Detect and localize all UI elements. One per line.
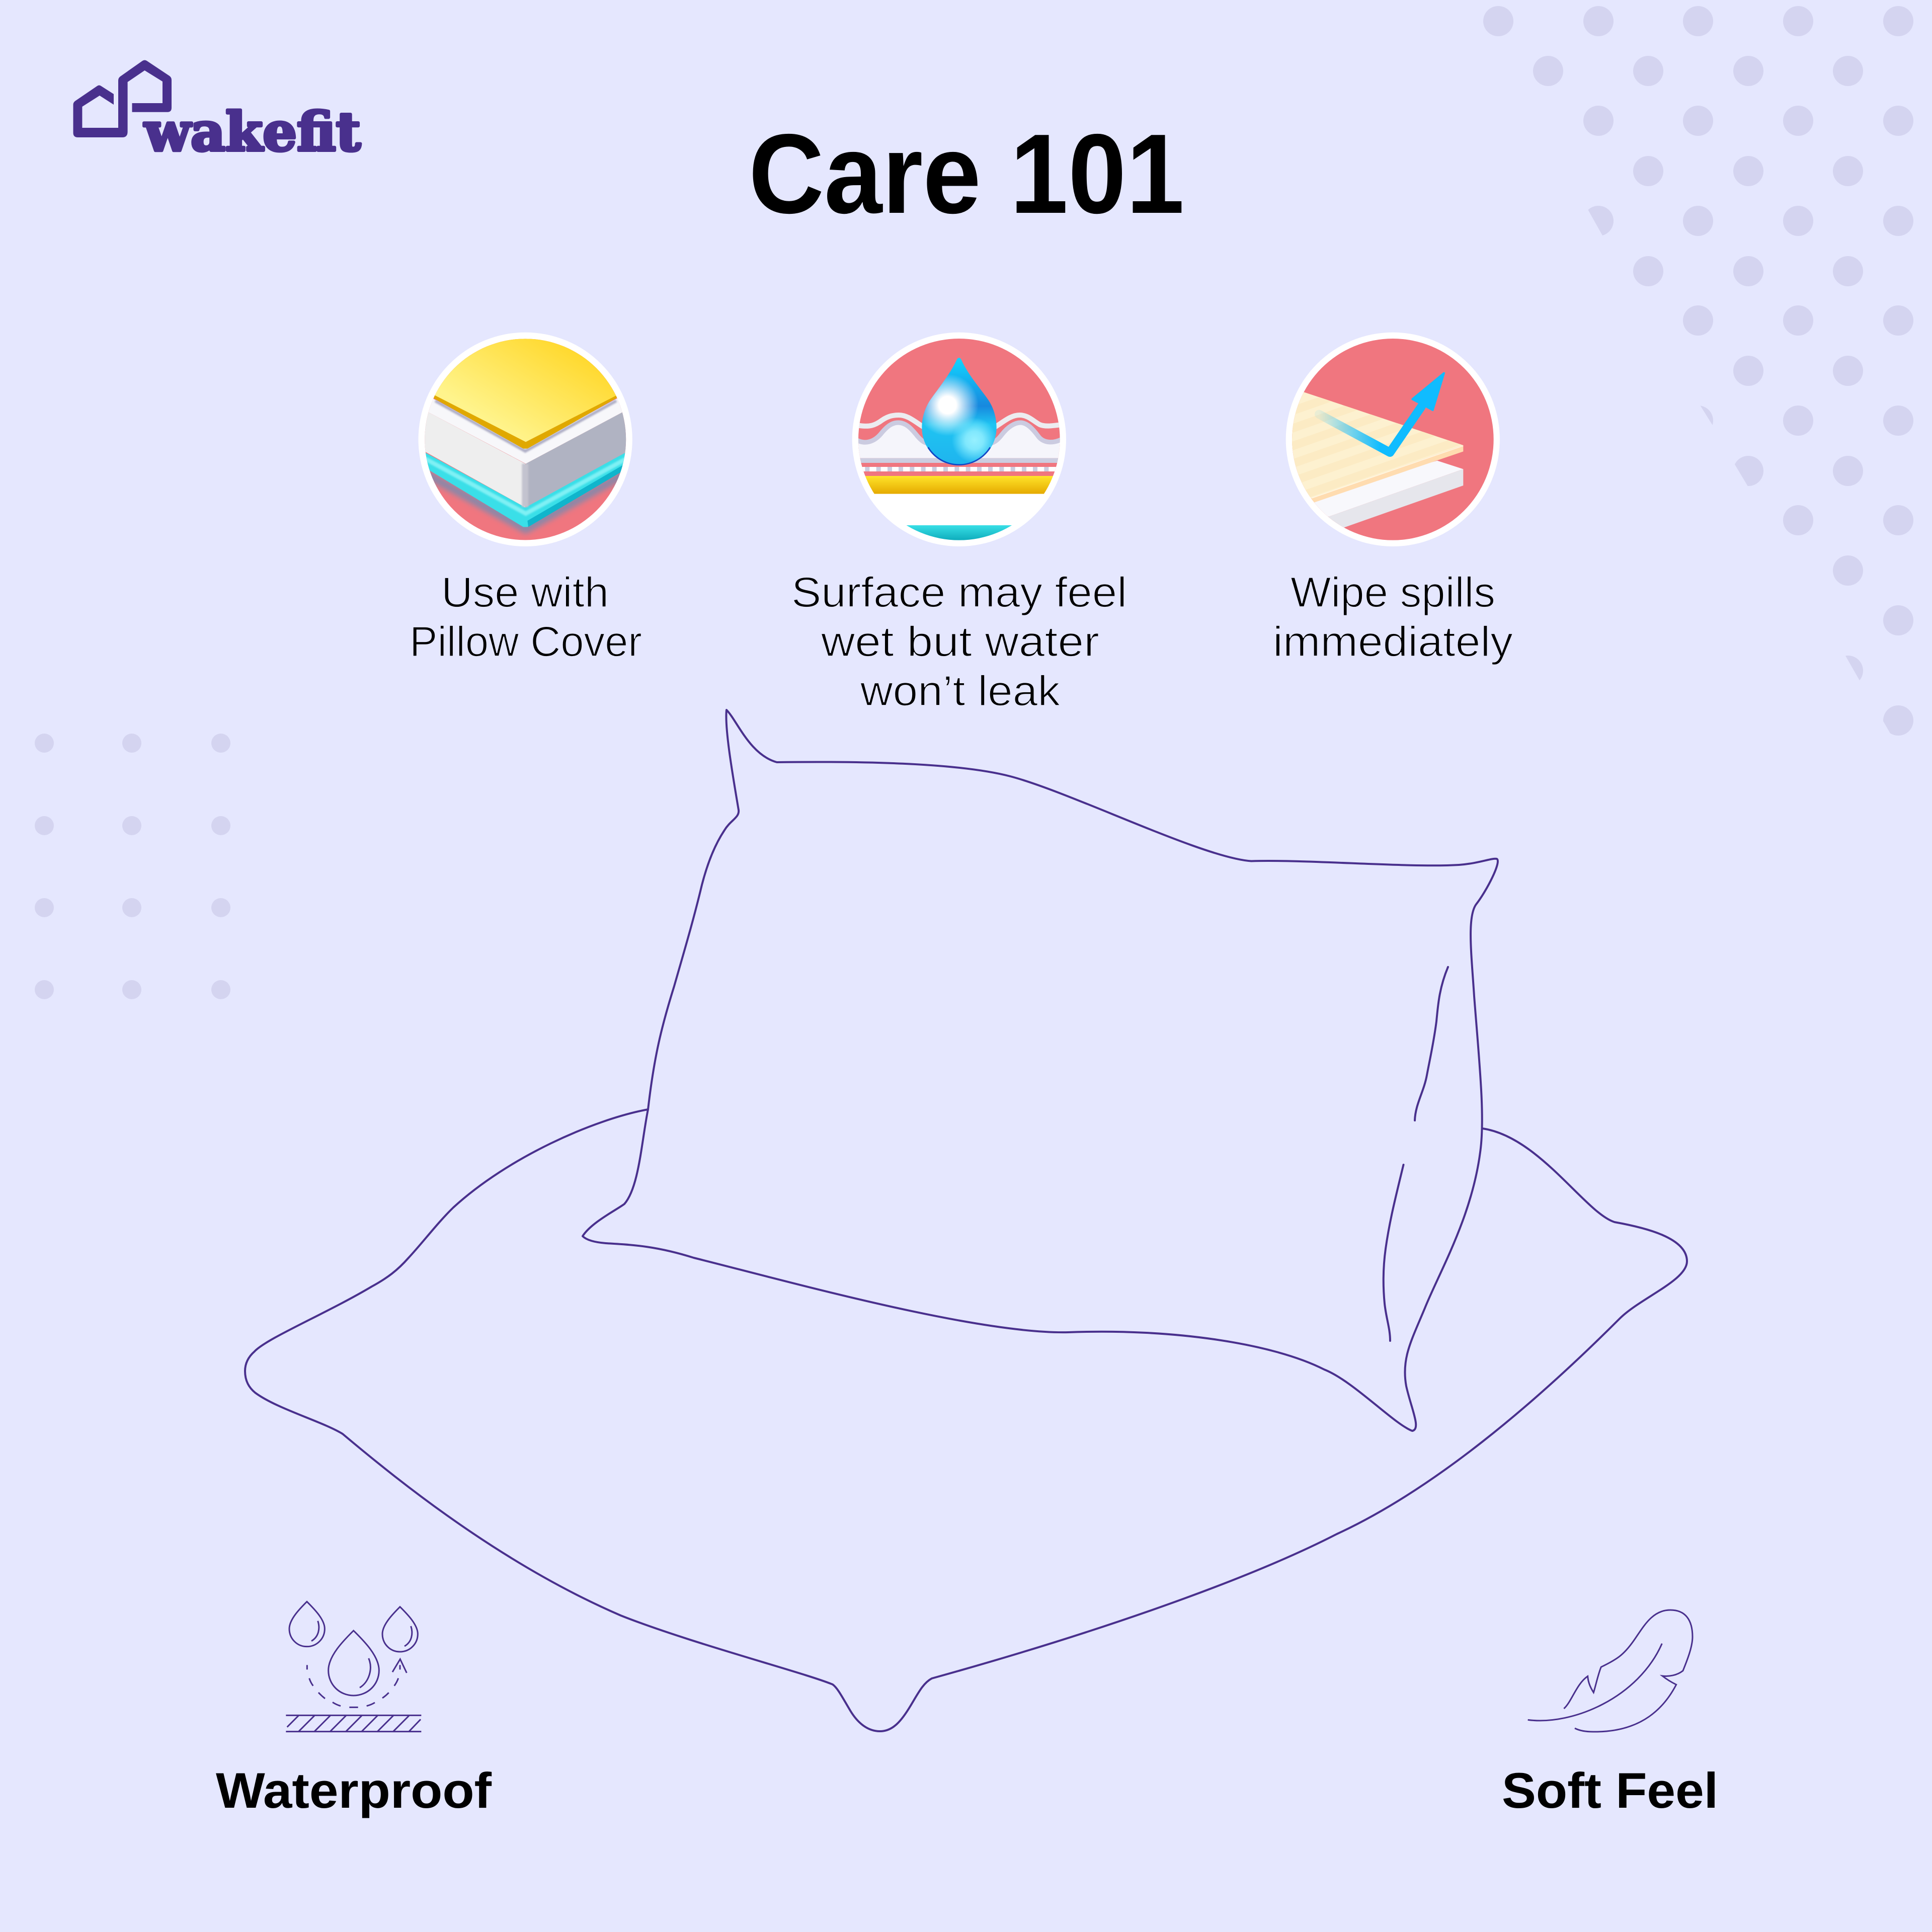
caption: surface may feel wet: wet but water [821, 618, 1099, 665]
caption: wipe spills immediately: immediately [1273, 618, 1513, 665]
pillow crease upper [1415, 967, 1448, 1120]
lower flat pillow outline [245, 1109, 1687, 1731]
icon: wipe spills [1286, 333, 1500, 546]
label: soft feel: Soft Feel [1502, 1762, 1718, 1818]
logo: wakefit [73, 60, 361, 163]
caption: wipe spills immediately: Wipe spills [1291, 569, 1495, 616]
upper standing pillow outline [583, 710, 1498, 1431]
caption: surface may feel wet [791, 569, 1127, 714]
title: Care 101 [749, 110, 1184, 237]
icon: feather [1528, 1610, 1693, 1732]
caption: surface may feel wet: Surface may feel [791, 569, 1127, 616]
decorative dot grid left [35, 734, 230, 999]
decorative dot pattern top right [1483, 6, 1913, 736]
label: waterproof: Waterproof [216, 1762, 492, 1818]
caption: use with pillow cover [410, 569, 642, 665]
pillow crease lower [1384, 1165, 1404, 1341]
caption: wipe spills immediately [1273, 569, 1513, 665]
icon: waterproof layers with drop [852, 333, 1066, 546]
logo wordmark: wakefit [144, 100, 361, 163]
caption: use with pillow cover: Use with [441, 569, 609, 616]
caption: use with pillow cover: Pillow Cover [410, 618, 642, 665]
water drop [922, 358, 997, 465]
icon: pillow cover layers [418, 333, 632, 547]
icon: waterproof [286, 1601, 421, 1732]
caption: surface may feel wet: won’t leak [860, 667, 1061, 714]
pillow illustration [245, 710, 1687, 1731]
icon: logo houses [73, 60, 172, 137]
arrow [1319, 373, 1444, 452]
